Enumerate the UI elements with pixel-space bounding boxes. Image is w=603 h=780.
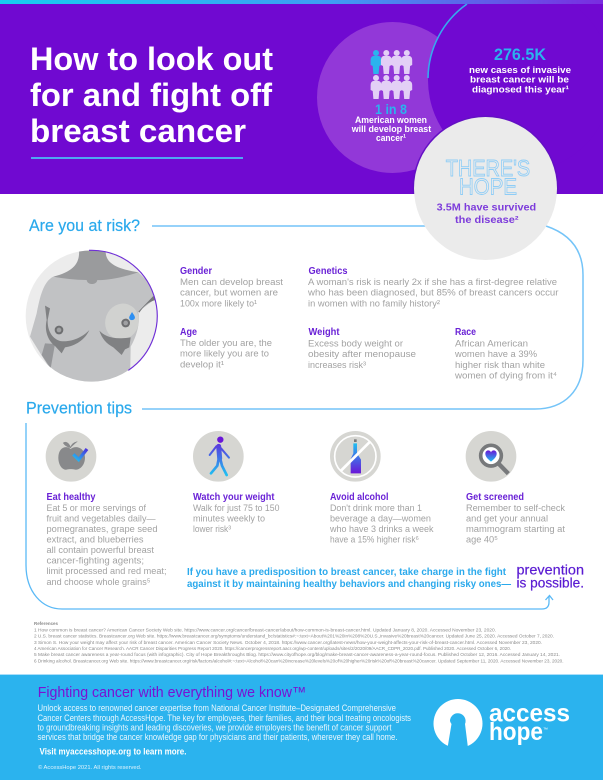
heading: prevention tips: Prevention tips [26,398,132,418]
tip: eat healthy: and choose whole grains⁵ [46,577,151,588]
risk factor: gender: cancer, but women are [180,288,278,299]
footer text: Cancer Centers through AccessHope. The key for employees, their families, and their local treating oncologists [38,713,411,723]
text: 1 in 8 stat: American women [355,115,427,126]
risk factor: weight: increases risk³ [308,360,366,371]
risk factor: gender: 100x more likely to¹ [180,298,257,309]
risk factor: genetics: Genetics [308,266,348,277]
risk factor: genetics [307,266,559,309]
risk factor: age: Age [180,327,197,338]
logo: access hope: access [489,700,570,728]
stat circle: 276.5K: breast cancer will be [470,74,569,86]
icon: apple with check [46,431,96,482]
tip: get screened: mammogram starting at [466,524,565,535]
references: 6 Drinking alcohol. Breastcancer.org Web site. https://www.breastcancer.org/risk/factors/alcohol#:~:text=Alcohol%20can%20increase%20levels%20of%20higher%20risk%20of%20breast%20cancer. Updated September 11, 2020. Accessed November 23, 2020. [34,658,564,664]
stat circle: 276.5K: diagnosed this year¹ [472,84,569,95]
risk factor: race: women have a 39% [454,349,537,360]
stat circle: 276.5K [427,4,571,130]
risk factor: age [180,327,272,370]
risk factor: weight: Excess body weight or [308,338,404,350]
tip: avoid alcohol: have a 15% higher risk⁶ [330,535,419,546]
footer band [0,674,603,780]
panel: are you at risk connector line [142,226,583,409]
callout: prevention is possible: prevention [516,562,584,578]
tip: avoid alcohol: Avoid alcohol [330,492,389,503]
footer text: Visit myaccesshope.org to learn more. [40,746,186,756]
tip: get screened: age 40⁵ [466,535,498,546]
title: for and fight off [30,77,272,113]
tip: avoid alcohol [329,492,434,546]
references: 2 U.S. breast cancer statistics. Breastcancer.org Web site. https://www.breastcancer.org/symptoms/understand_bc/statistics#:~:text=About%201%20in%208%20U.S.,invasive%20breast%20cancer. Updated June 25, 2020. Accessed October 7, 2020. [34,634,554,639]
tip: watch your weight: Walk for just 75 to 150 [193,503,280,514]
risk factor: genetics: A woman's risk is nearly 2x if she has a first-degree relative [308,277,557,288]
references: 3 Simon S. How your weight may affect your risk of breast cancer. American Cancer Society News. October 4, 2018. https://www.cancer.org/latest-news/how-your-weight-affects-your-risk-of-breast-cancer.html. Accessed November 23, 2020. [34,640,542,645]
tip: avoid alcohol: beverage a day—women [330,514,431,525]
title: How to look out [30,41,273,77]
risk factor: genetics: in women with no family history² [308,298,441,309]
tip: get screened: and get your annual [466,514,548,525]
callout: there's hope: THERE'S [446,155,530,181]
risk factor: weight: Weight [308,327,340,338]
tip: get screened: Remember to self-check [466,503,565,514]
tip: watch your weight: Watch your weight [193,492,275,503]
tip: avoid alcohol: who have 3 drinks a week [329,524,434,535]
tip: get screened: Get screened [466,492,524,503]
callout: there's hope: 3.5M have survived [437,202,536,214]
tip: get screened [466,492,565,546]
tip: eat healthy: extract, and blueberries [46,535,144,546]
footer heading: Fighting cancer with everything we know™ [38,685,306,701]
logo: access hope: hope [489,718,543,746]
footer text [38,703,411,771]
risk factor: race: higher risk than white [455,360,545,371]
risk factor: race [454,327,557,382]
tip: eat healthy: fruit and vegetables daily— [46,514,156,525]
risk factor: gender [180,266,283,309]
text: 1 in 8 stat: cancer¹ [376,133,406,144]
stat circle: 276.5K: new cases of invasive [469,65,571,76]
footer text: Unlock access to renowned cancer expertise from National Cancer Institute–Designated Comprehensive [38,703,396,713]
risk factor: gender: Gender [180,266,212,277]
risk factor: race: Race [455,327,476,338]
references: 4 American Association for Cancer Research. AACR Cancer Disparities Progress Report 2020. https://cancerprogressreport.aacr.org/wp-content/uploads/sites/2/2020/09/AACR_CDPR_2020.pdf. Published 2020. Accessed October 6, 2020. [34,646,511,651]
references: References [34,621,59,626]
risk factor: race: African American [455,338,528,350]
icon: magnifier with heart [466,431,516,482]
logo: access hope: ™ [543,727,548,733]
risk factor: age: develop it¹ [180,359,224,370]
tip: watch your weight [193,492,280,535]
title underline [31,157,243,159]
callout: there's hope: HOPE [459,173,517,199]
tip: eat healthy: all contain powerful breast [46,545,154,556]
text: 1 in 8 stat: will develop breast [351,124,432,135]
tip: watch your weight: lower risk³ [193,524,231,535]
tip: watch your weight: minutes weekly to [193,514,265,525]
risk factor: genetics: who has been diagnosed, but 85% of breast cancers occur [307,288,559,299]
risk factor: gender: Men can develop breast [180,277,283,288]
connector line with arrow [26,423,553,609]
footer text: to groundbreaking insights and leading discoveries, we provide employers the benefit of cancer support [38,722,392,732]
callout: there's hope: the disease² [455,214,519,226]
risk factor: age: more likely you are to [180,349,269,360]
icon: walking person [193,431,244,482]
callout: prevention is possible: is possible. [516,576,584,590]
tip: eat healthy: Eat healthy [46,492,96,503]
logo: access hope [434,699,570,748]
tip: avoid alcohol: Don't drink more than 1 [330,503,422,514]
callout: prevention is possible: against it by maintaining healthy behaviors and changing risky ones— [187,578,511,590]
risk factor: age: The older you are, the [180,338,272,349]
tip: eat healthy [46,492,166,588]
heading: are you at risk: Are you at risk? [29,216,140,235]
footer text: services that bridge the cancer knowledge gap for physicians and their patients, wherever they call home. [38,732,398,742]
stat circle: 276.5K: 276.5K [494,45,547,64]
tip: eat healthy: Eat 5 or more servings of [46,503,146,514]
icon: eight people [371,50,412,99]
tip: eat healthy: pomegranates, grape seed [46,524,158,535]
icon: crossed out bottle [330,431,381,482]
references: 5 Make breast cancer awareness a year-round focus (with infographic). City of Hope Breakthroughs Blog. https://www.cityofhope.org/blog/make-breast-cancer-awareness-a-year-round-focus. Published October 12, 2016. Accessed January 14, 2021. [34,652,560,657]
references: 1 How common is breast cancer? American Cancer Society Web site. https://www.cancer.org/cancer/breast-cancer/about/how-common-is-breast-cancer.html. Updated January 8, 2020. Accessed November 23, 2020. [34,628,496,632]
stat circle: 1 in 8 [317,22,468,173]
title [30,41,273,149]
callout: there's hope [414,117,557,260]
header band [0,0,603,194]
tip: eat healthy: cancer-fighting agents; [46,556,144,567]
risk factor: weight [308,327,416,371]
illustration: torso in circle [26,250,158,387]
footer text: © AccessHope 2021. All rights reserved. [38,764,142,771]
risk factor: weight: obesity after menopause [308,349,416,360]
risk factor: race: women of dying from it⁴ [454,370,557,382]
tip: eat healthy: limit processed and red meat; [46,566,166,577]
text: 1 in 8 stat [351,102,432,144]
callout: prevention is possible: If you have a predisposition to breast cancer, take charge in the fight [187,566,506,578]
title: breast cancer [30,113,246,149]
text: 1 in 8 stat: 1 in 8 [375,102,407,117]
callout: prevention is possible [187,562,584,590]
references [34,621,564,664]
